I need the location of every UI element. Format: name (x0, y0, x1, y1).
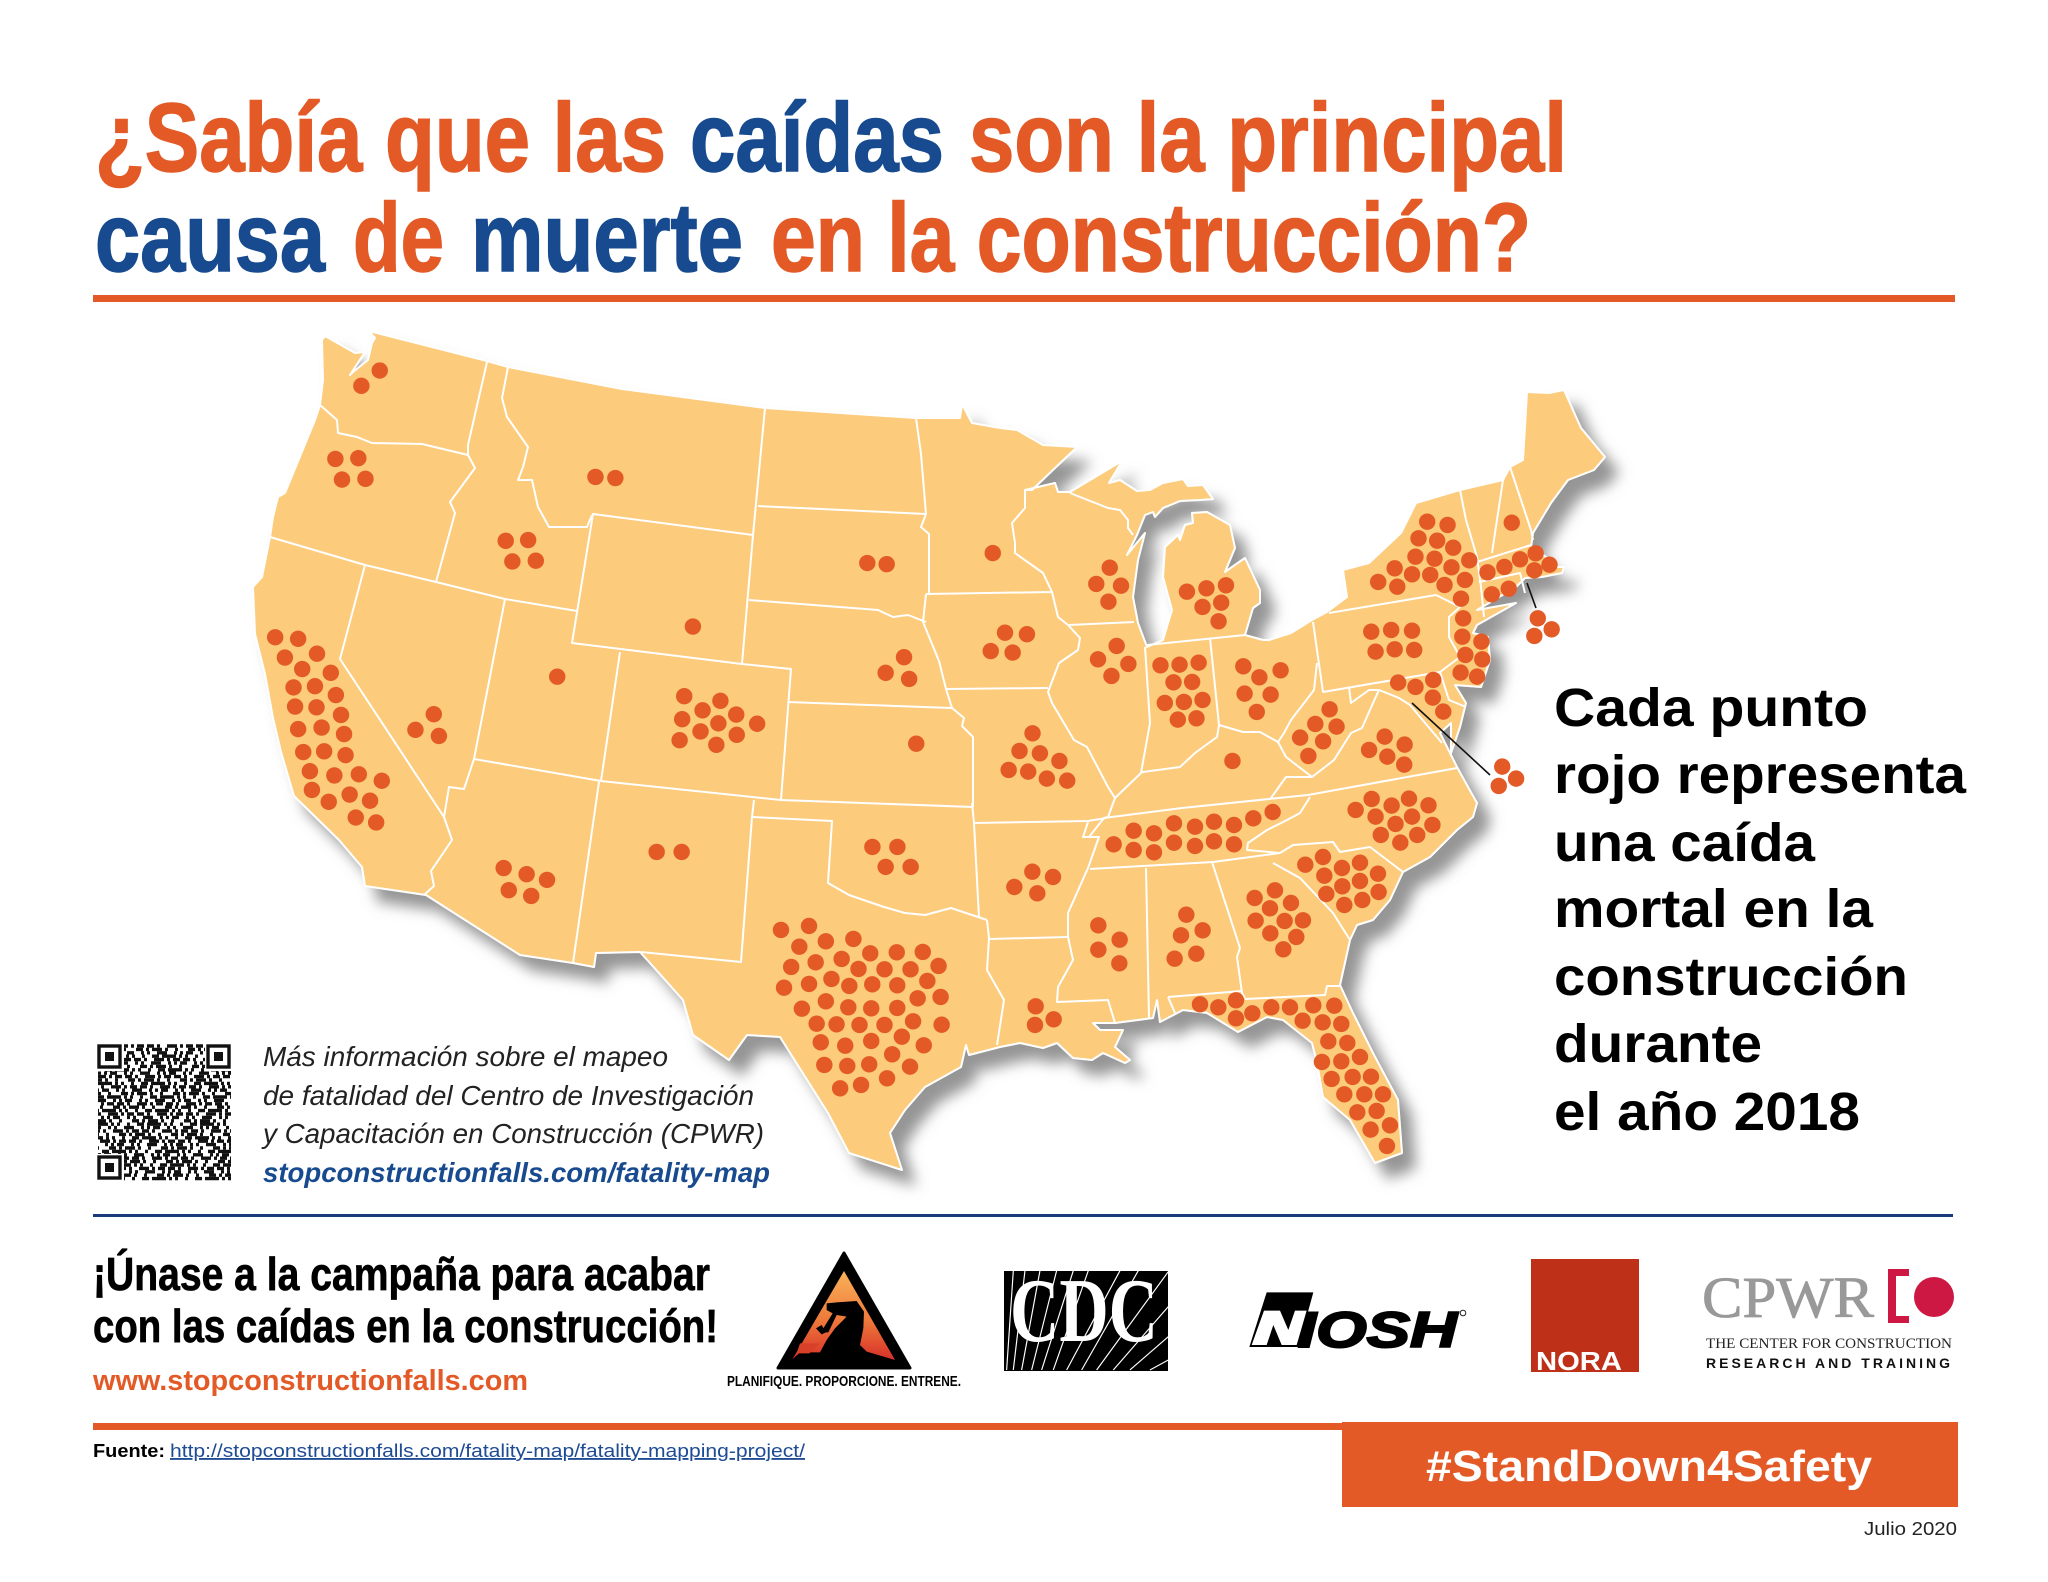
logo: CPWR: RESEARCH AND TRAINING (1706, 1355, 1950, 1371)
title: muerte (471, 183, 743, 292)
logo: plan provide train triangle: PLANIFIQUE. PROPORCIONE. ENTRENE. (727, 1373, 961, 1390)
side statement: una caída (1554, 813, 1816, 873)
title: ¿Sabía que las (95, 83, 666, 192)
logo: CDC: CDC (1010, 1260, 1158, 1361)
title: de (353, 183, 444, 292)
dots: midwest and northeast states (1000, 513, 1560, 851)
title: causa (95, 183, 326, 292)
logo: plan provide train triangle (727, 1253, 961, 1390)
dots: western states (267, 362, 1035, 904)
title: son la principal (969, 83, 1567, 192)
callout leader lines (1412, 583, 1536, 775)
dots: southern states (1006, 804, 1398, 1154)
hashtag banner (1342, 1422, 1958, 1507)
title: en la construcción? (771, 183, 1531, 292)
date: Julio 2020 (1864, 1519, 1957, 1539)
more information text: de fatalidad del Centro de Investigación (263, 1080, 754, 1111)
campaign call to action: ¡Únase a la campaña para acabar (93, 1248, 710, 1300)
logo: NORA (1531, 1259, 1639, 1376)
side statement (1554, 678, 1967, 1142)
campaign call to action (92, 1248, 718, 1397)
side statement: mortal en la (1554, 879, 1874, 939)
side statement: el año 2018 (1554, 1082, 1860, 1142)
side statement: construcción (1554, 947, 1908, 1007)
title: caídas (690, 83, 944, 192)
source line: Fuente: (93, 1441, 165, 1461)
hashtag banner: #StandDown4Safety (1426, 1442, 1873, 1491)
title (95, 83, 1567, 292)
logo: NORA: NORA (1536, 1348, 1622, 1376)
dots: Texas (773, 918, 950, 1097)
logo: CPWR (1702, 1265, 1954, 1371)
logo: CPWR: CPWR (1702, 1265, 1874, 1330)
logo: CPWR: THE CENTER FOR CONSTRUCTION (1706, 1336, 1953, 1352)
campaign call to action: www.stopconstructionfalls.com (92, 1365, 528, 1397)
QR code (96, 1043, 233, 1182)
more information text: Más información sobre el mapeo (263, 1041, 668, 1072)
more information text: y Capacitación en Construcción (CPWR) (261, 1118, 764, 1149)
map outline (253, 331, 1605, 1170)
state borders (270, 362, 1533, 1045)
logo: NIOSH: IOSH (1298, 1302, 1458, 1358)
side statement: durante (1554, 1014, 1762, 1074)
side statement: Cada punto (1554, 678, 1868, 738)
more information text (261, 1041, 770, 1188)
map of the United States (253, 331, 1605, 1170)
side statement: rojo representa (1554, 745, 1967, 805)
campaign call to action: con las caídas en la construcción! (93, 1300, 718, 1352)
logo: NIOSH (1249, 1292, 1466, 1358)
source line: http://stopconstructionfalls.com/fatality-map/fatality-mapping-project/ (170, 1440, 806, 1461)
more information text: stopconstructionfalls.com/fatality-map (263, 1157, 770, 1188)
